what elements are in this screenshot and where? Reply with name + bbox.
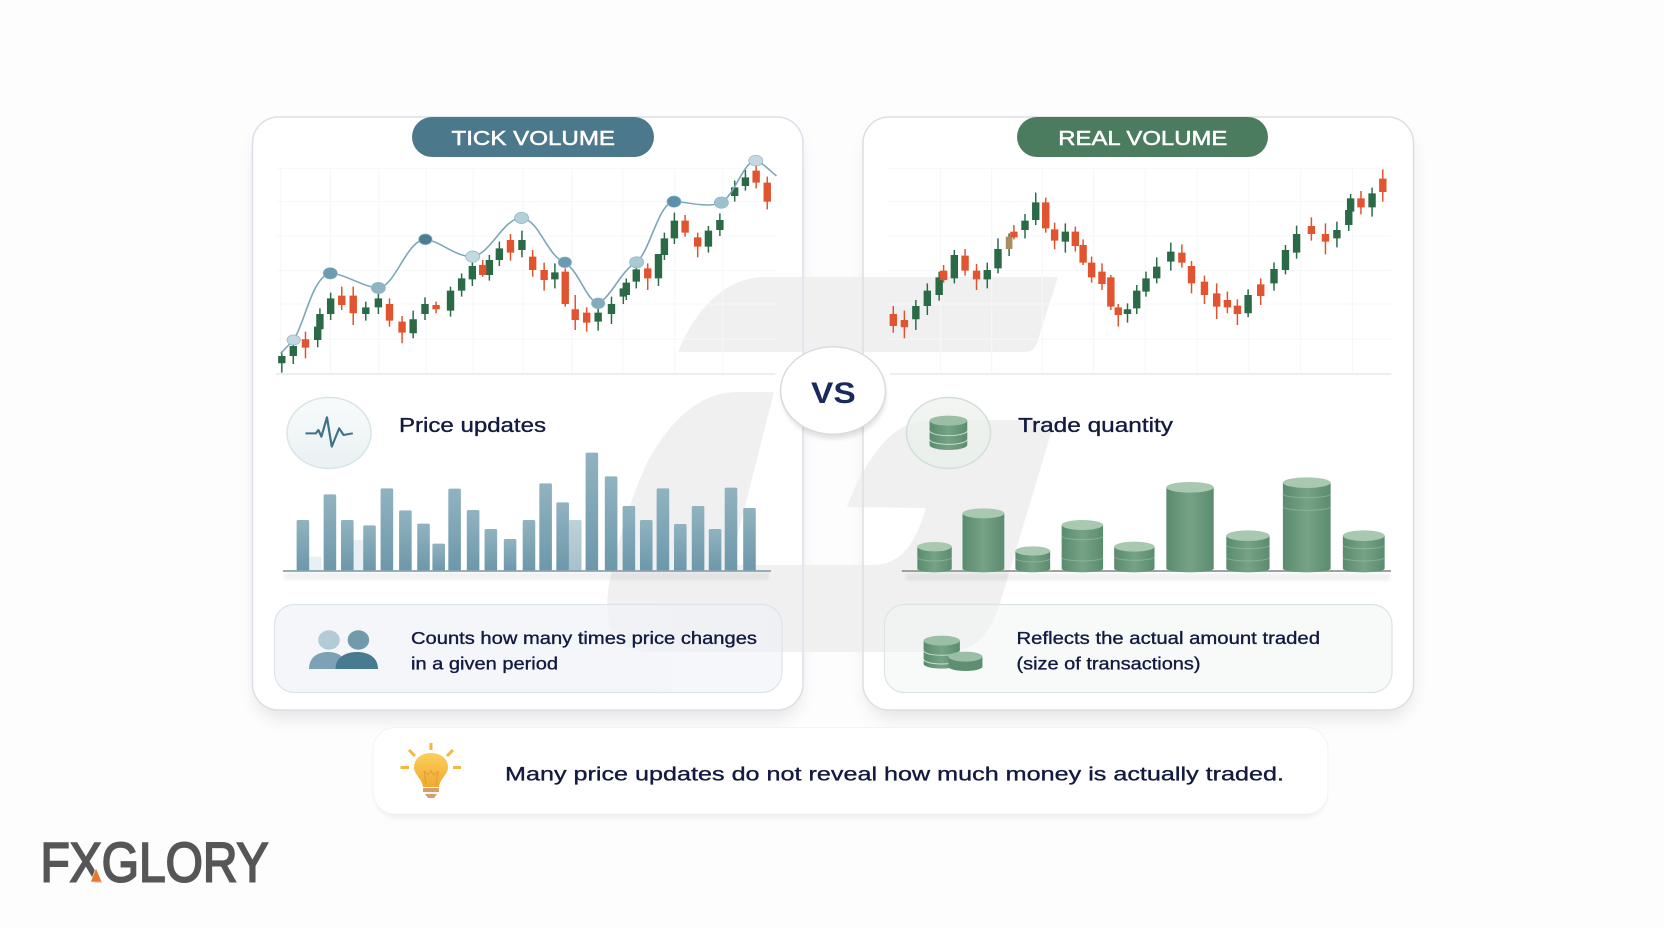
icon: coins bbox=[924, 636, 982, 671]
icon: coin stack bbox=[906, 398, 990, 468]
title pill: real volume bbox=[1017, 117, 1268, 157]
watermark logo bbox=[607, 277, 1058, 652]
panel border bbox=[252, 117, 803, 710]
heading: price updates: Price updates bbox=[399, 415, 546, 437]
logo: FXGLORY: FXGLORY bbox=[40, 830, 268, 894]
panel: real volume bbox=[863, 117, 1414, 710]
panel: tick volume bbox=[252, 117, 803, 710]
description text bbox=[411, 628, 757, 674]
candlestick chart with tick line bbox=[276, 155, 776, 374]
description text bbox=[1016, 628, 1320, 674]
callout text: Many price updates do not reveal how much money is actually traded. bbox=[505, 764, 1284, 786]
icon: people bbox=[309, 630, 378, 669]
description text: in a given period bbox=[411, 654, 558, 674]
title pill: tick volume bbox=[412, 117, 654, 157]
logo accent bbox=[90, 868, 102, 882]
icon: pulse bbox=[287, 398, 371, 468]
bar chart: tick counts bbox=[283, 453, 771, 580]
icon: lightbulb bbox=[400, 743, 461, 798]
description box: tick volume bbox=[274, 604, 782, 692]
heading: trade quantity: Trade quantity bbox=[1018, 415, 1173, 437]
callout bbox=[373, 728, 1328, 818]
description text: (size of transactions) bbox=[1016, 654, 1200, 674]
panel border bbox=[863, 117, 1414, 710]
title pill: real volume: REAL VOLUME bbox=[1058, 128, 1227, 150]
description box: real volume bbox=[884, 604, 1392, 692]
vs badge bbox=[780, 347, 886, 439]
bar chart: stacked coins bbox=[902, 477, 1391, 581]
description text: Reflects the actual amount traded bbox=[1016, 628, 1320, 648]
panel shadows bbox=[252, 117, 1414, 718]
candlestick chart bbox=[888, 168, 1391, 374]
title pill: tick volume: TICK VOLUME bbox=[452, 128, 615, 150]
vs badge: VS bbox=[811, 377, 856, 410]
description text: Counts how many times price changes bbox=[411, 628, 757, 648]
